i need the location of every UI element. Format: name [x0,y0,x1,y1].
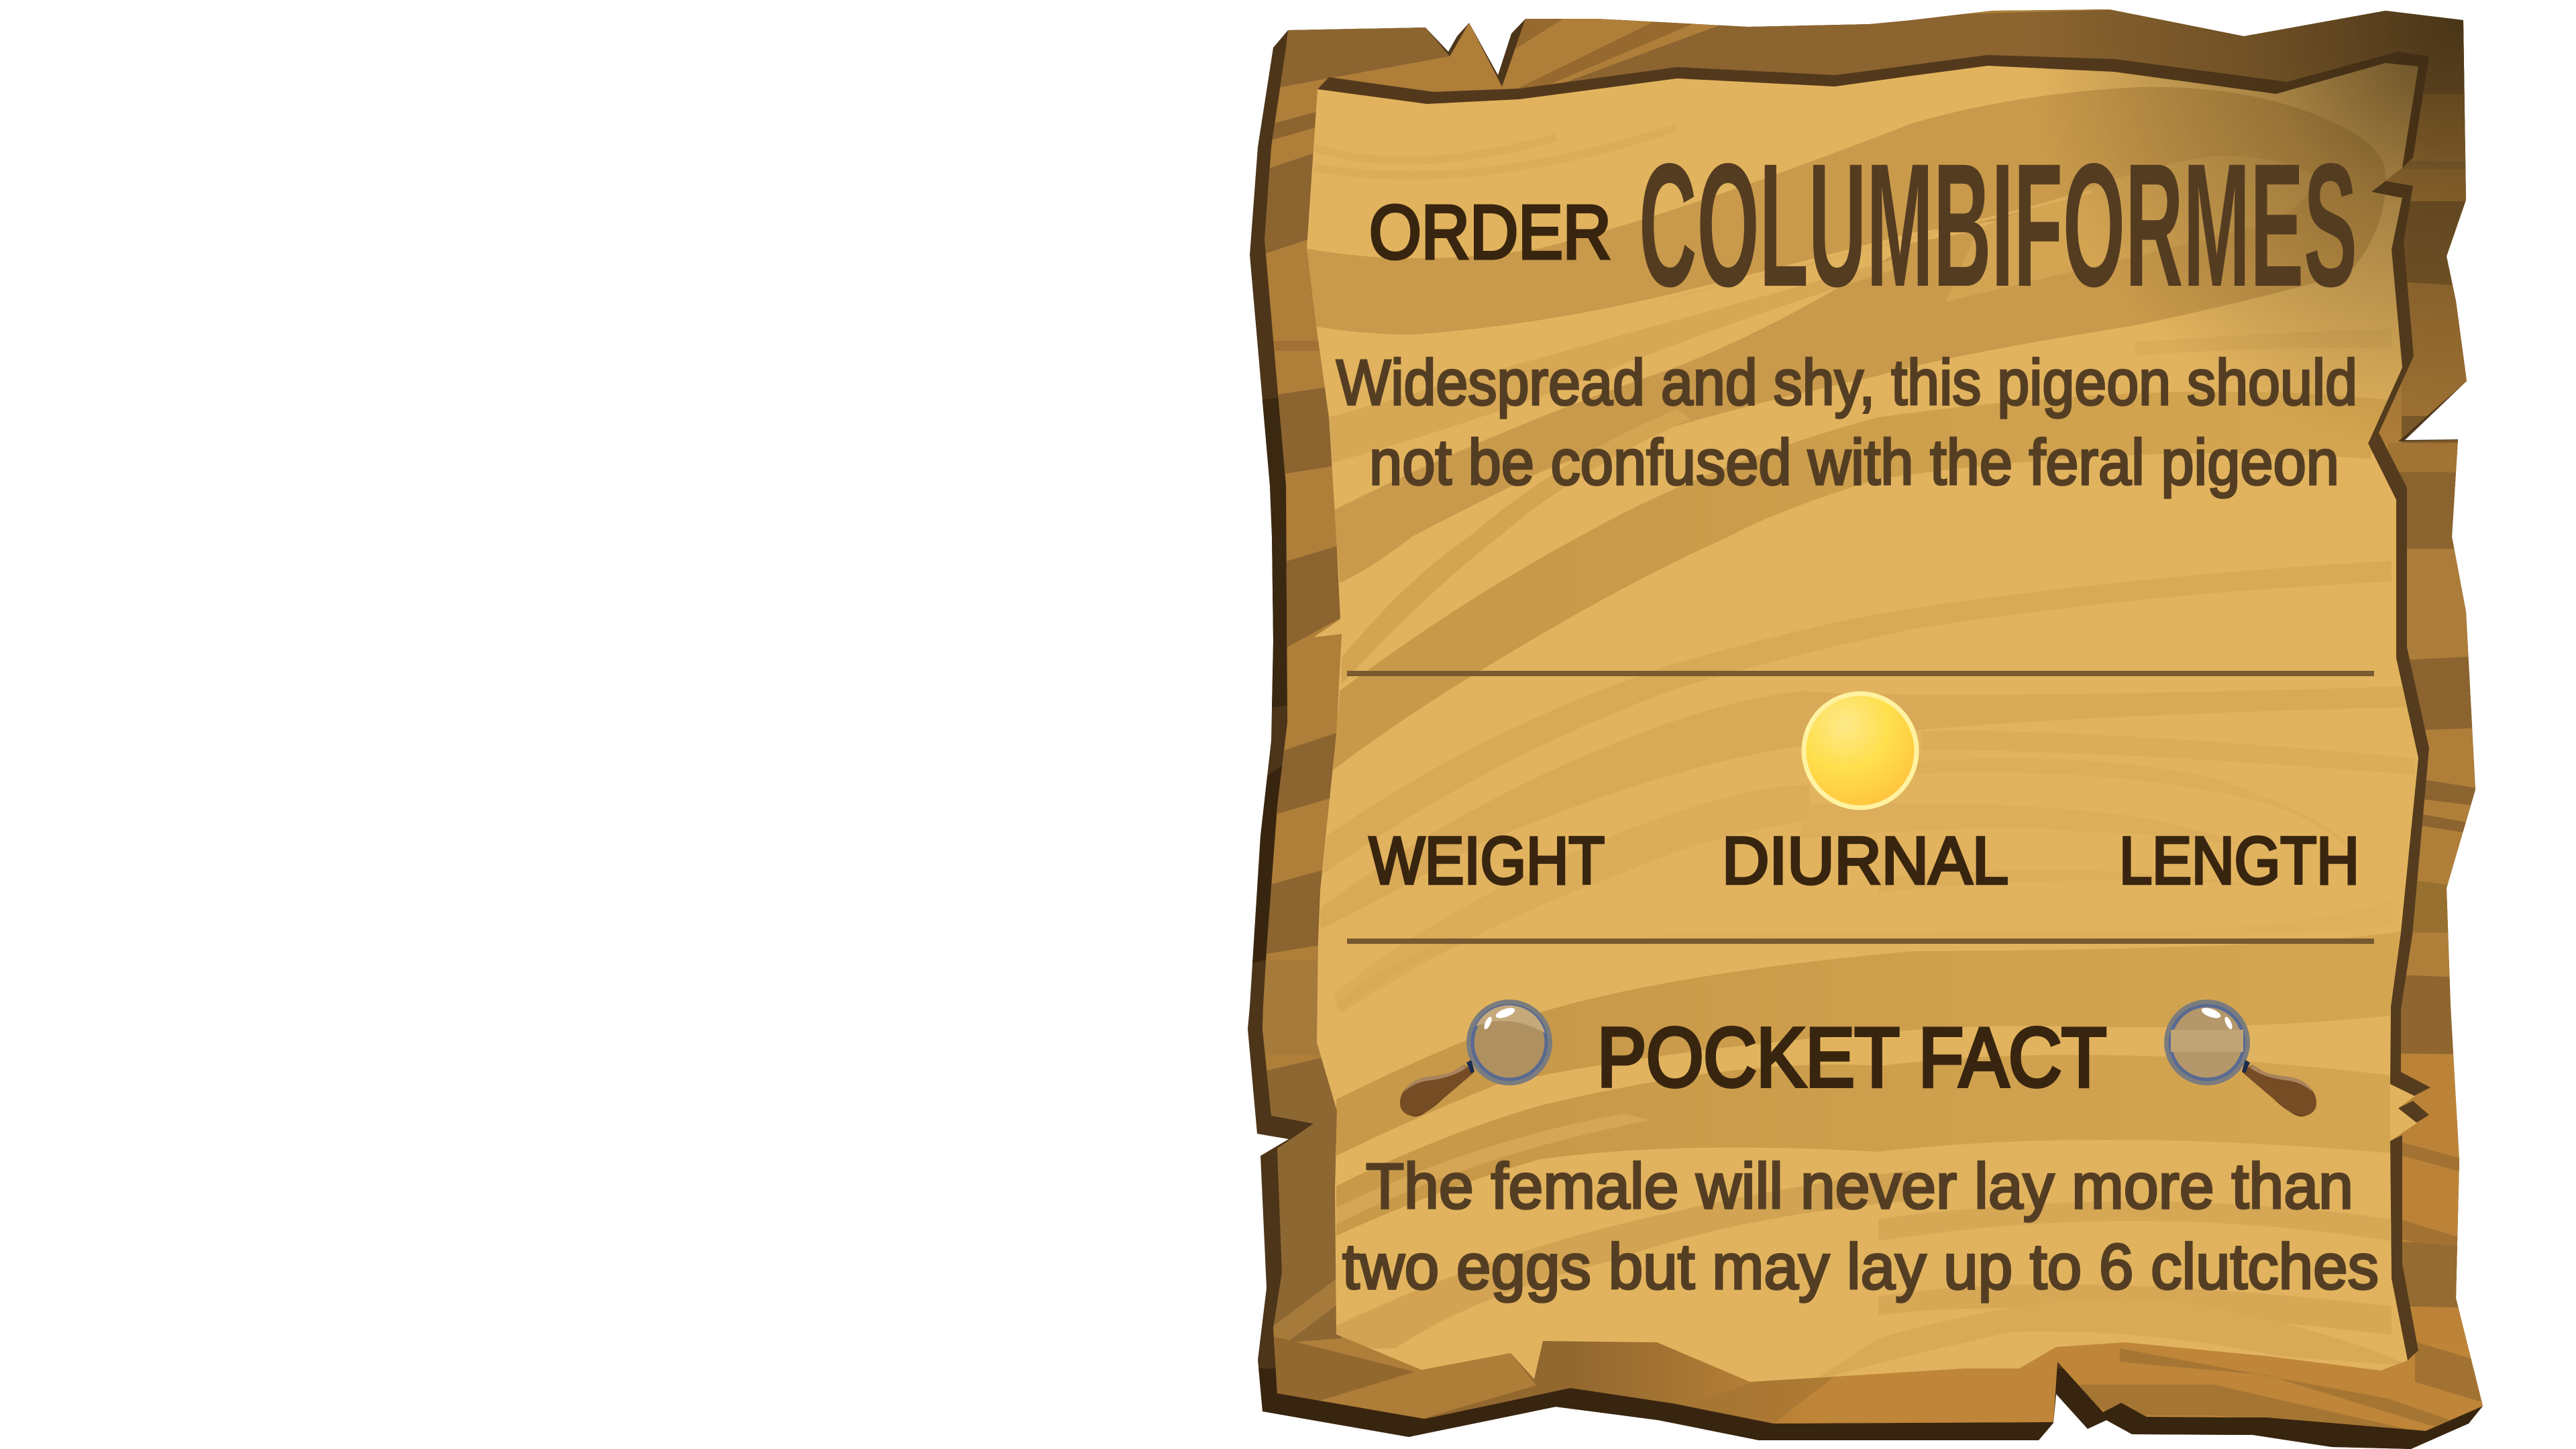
divider bottom [1347,938,2374,944]
icon: magnifying glass left [1400,1002,1550,1116]
description text: Widespread and shy, this pigeon should [1336,347,2357,419]
pocket fact text [1342,1150,2379,1303]
pocket fact text: two eggs but may lay up to 6 clutches [1342,1231,2379,1303]
top-right shading [2061,9,2467,413]
divider top [1347,671,2374,676]
icon: magnifying glass right [2167,1002,2316,1116]
wooden board [1241,0,2496,1449]
stat label: diurnal: DIURNAL [1722,823,2008,898]
board dark edge [1241,0,2496,1449]
board frame wood [1241,0,2496,1449]
heading: pocket fact: POCKET FACT [1597,1012,2106,1104]
pocket fact text: The female will never lay more than [1366,1150,2353,1222]
title: order label: ORDER [1369,190,1611,274]
description text [1336,347,2357,498]
panel dark inset border [1318,52,2430,1379]
icon: sun diurnal [1804,694,1917,808]
description text: not be confused with the feral pigeon [1369,427,2339,498]
panel wood grain [1275,40,2449,1395]
stat label: length: LENGTH [2119,823,2359,898]
stat label: weight: WEIGHT [1369,823,1605,898]
